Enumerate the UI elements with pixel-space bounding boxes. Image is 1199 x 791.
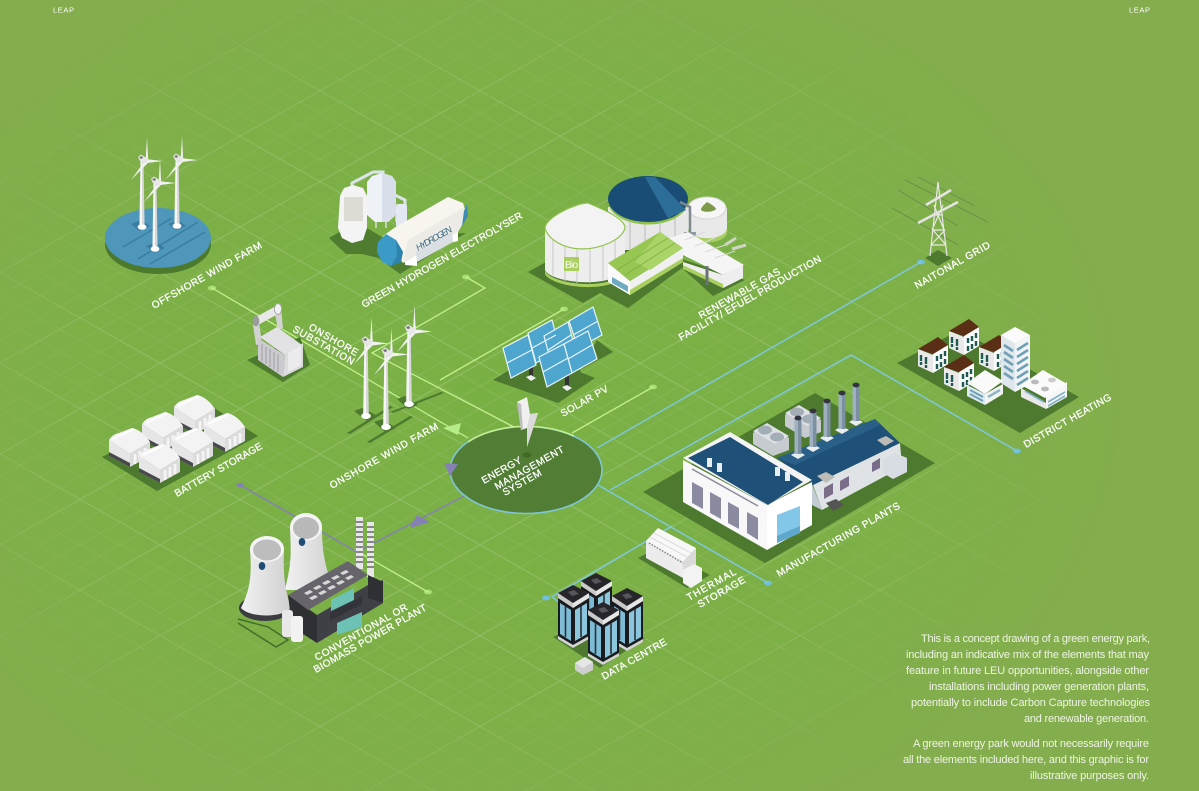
offshore wind farm bbox=[105, 136, 211, 274]
renewable gas facility bbox=[528, 176, 746, 308]
label: thermal storage: THERMAL bbox=[685, 567, 739, 604]
connector: national grid bbox=[597, 260, 925, 448]
label: green hydrogen electrolyser: GREEN HYDROGEN ELECTROLYSER bbox=[360, 211, 525, 311]
label: offshore wind farm: OFFSHORE WIND FARM bbox=[150, 240, 264, 312]
thermal storage bbox=[638, 528, 710, 588]
connector: data centre bbox=[542, 526, 672, 603]
label: conventional or biomass power plant: BIOMASS POWER PLANT bbox=[312, 603, 429, 676]
text block: concept note: potentially to include Carbon Capture technologies bbox=[911, 697, 1150, 709]
connector: green hydrogen bbox=[372, 275, 514, 427]
text block: concept note: This is a concept drawing of a green energy park, bbox=[921, 633, 1150, 645]
substation bbox=[247, 304, 310, 382]
label: manufacturing plants: MANUFACTURING PLANTS bbox=[775, 501, 902, 580]
text block: concept note: including an indicative mix of the elements that may bbox=[906, 649, 1150, 661]
text block: concept note: feature in future LEU opportunities, alongside other bbox=[906, 665, 1149, 677]
green hydrogen electrolyser bbox=[329, 172, 468, 274]
data centre bbox=[553, 573, 645, 675]
solar PV bbox=[493, 307, 613, 403]
text block: concept note bbox=[903, 633, 1150, 782]
arrow: green input bbox=[443, 423, 461, 435]
label: onshore wind farm: ONSHORE WIND FARM bbox=[328, 421, 440, 492]
hydrogen tank text: HYDROGEN bbox=[414, 224, 454, 253]
connector: battery and plant purple bbox=[236, 483, 464, 552]
header: LEAP right: LEAP bbox=[1129, 6, 1150, 14]
district heating bbox=[897, 319, 1079, 433]
label: thermal storage: STORAGE bbox=[696, 575, 748, 611]
label: onshore substation: SUBSTATION bbox=[291, 324, 356, 368]
label: district heating: DISTRICT HEATING bbox=[1022, 392, 1114, 451]
energy management system circle bbox=[450, 426, 602, 514]
label: onshore substation: ONSHORE bbox=[307, 322, 360, 359]
battery storage bbox=[102, 395, 258, 491]
label: energy management system: ENERGY bbox=[480, 455, 524, 487]
label: data centre: DATA CENTRE bbox=[600, 637, 669, 683]
label: renewable gas facility: RENEWABLE GAS bbox=[697, 266, 783, 322]
conventional or biomass power plant bbox=[238, 513, 383, 647]
connector: offshore wind bbox=[208, 286, 468, 438]
connector: solar PV bbox=[440, 307, 568, 380]
text block: concept note: illustrative purposes only. bbox=[1030, 770, 1149, 782]
text block: concept note: A green energy park would not necessarily require bbox=[913, 738, 1149, 750]
label: conventional or biomass power plant: CONVENTIONAL OR bbox=[313, 602, 410, 664]
label: battery storage: BATTERY STORAGE bbox=[173, 441, 265, 500]
connector: conventional plant bbox=[355, 550, 432, 594]
connector: district heating bbox=[610, 355, 1021, 490]
label: energy management system: SYSTEM bbox=[501, 468, 544, 499]
connector: thermal storage bbox=[598, 485, 772, 585]
onshore wind farm bbox=[347, 305, 444, 443]
header: LEAP left: LEAP bbox=[53, 6, 74, 14]
label: solar PV: SOLAR PV bbox=[559, 384, 611, 420]
manufacturing plants bbox=[643, 383, 935, 563]
label: national grid: NAITONAL GRID bbox=[913, 240, 992, 292]
connector: solar lower bbox=[572, 385, 657, 433]
renewable gas facility: Bio bbox=[565, 260, 578, 271]
arrow: purple conventional bbox=[410, 515, 430, 528]
national grid pylon bbox=[892, 177, 988, 266]
labels bbox=[150, 211, 1114, 683]
icon: lightning bolt bbox=[517, 397, 538, 447]
text block: concept note: installations including power generation plants, bbox=[929, 681, 1149, 693]
text block: concept note: and renewable generation. bbox=[1024, 713, 1149, 725]
arrow: purple on circle bbox=[444, 463, 458, 476]
label: renewable gas facility: FACILITY/ EFUEL PRODUCTION bbox=[677, 254, 823, 344]
text block: concept note: all the elements included here, and this graphic is for bbox=[903, 754, 1149, 766]
label: energy management system: MANAGEMENT bbox=[493, 445, 566, 493]
